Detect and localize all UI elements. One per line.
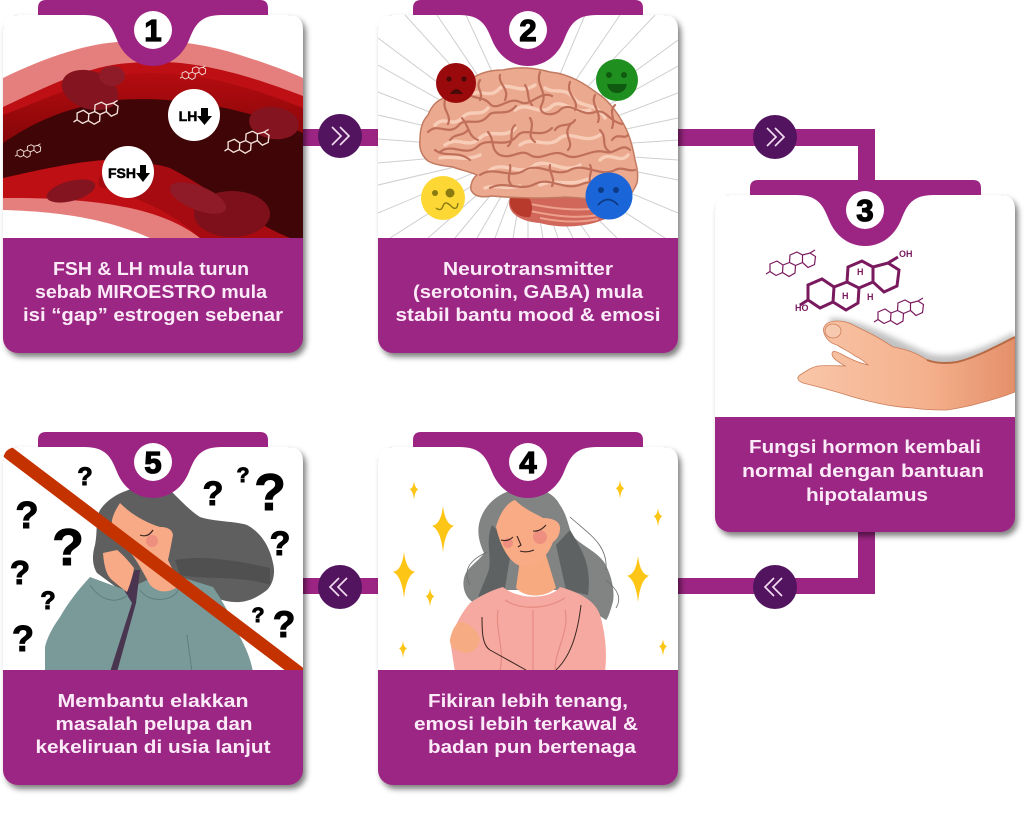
caption 1: sebab MIROESTRO mula	[35, 281, 268, 302]
illustration: blood vessel	[3, 41, 303, 238]
hair	[93, 487, 274, 602]
molecule labels: HO	[795, 303, 808, 313]
hand shadow	[830, 318, 1015, 370]
caption 4: badan pun bertenaga	[428, 736, 637, 757]
molecule labels: H	[867, 292, 874, 302]
caption 5: kekeliruan di usia lanjut	[36, 736, 270, 757]
badge: FSH down	[102, 146, 154, 198]
tab: number 1	[38, 0, 268, 66]
molecule labels: H	[857, 267, 864, 277]
hand	[450, 622, 480, 653]
tab: number 2	[413, 0, 643, 66]
cerebellum	[509, 198, 605, 226]
tab: number 4: 4	[519, 445, 537, 480]
tab: number 1: 1	[144, 13, 162, 48]
connector: step 4 to 5	[300, 565, 382, 609]
gyri highlights	[435, 85, 628, 190]
caption 4: emosi lebih terkawal &	[414, 713, 638, 734]
caption 1	[23, 258, 283, 325]
connector: step 1 to 2	[300, 114, 382, 158]
face and hand	[112, 503, 180, 591]
tab: number 3	[750, 180, 981, 246]
molecule labels	[795, 249, 912, 313]
caption 5	[36, 690, 270, 757]
question marks: ?	[10, 554, 30, 591]
card base 5	[3, 447, 303, 785]
illustration: brain with moods	[378, 15, 678, 238]
caption 5: Membantu elakkan	[58, 690, 248, 711]
caption 3: Fungsi hormon kembali	[749, 436, 981, 457]
caption 5: masalah pelupa dan	[56, 713, 253, 734]
card base 1	[3, 15, 303, 353]
question marks: ?	[203, 475, 223, 513]
tab: number 2: 2	[519, 13, 537, 48]
question marks: ?	[270, 525, 290, 563]
caption 2	[396, 258, 660, 325]
caption 3: normal dengan bantuan	[742, 460, 984, 481]
mood: green happy	[596, 59, 638, 101]
sweater	[45, 572, 253, 672]
caption 4	[414, 690, 638, 757]
molecules	[15, 66, 269, 158]
panel: step 4	[378, 447, 678, 785]
brain body	[420, 68, 638, 207]
tab: number 5	[38, 432, 268, 498]
molecule labels: OH	[899, 249, 912, 259]
question marks: ?	[52, 519, 84, 577]
mood: blue sad	[586, 172, 632, 220]
panel: step 2	[378, 15, 678, 353]
mood: yellow confused	[421, 176, 465, 220]
panel: step 1	[3, 15, 303, 353]
pink sweater	[450, 587, 606, 672]
question marks	[10, 463, 295, 659]
tab: number 4	[413, 432, 643, 498]
illustration: hormone molecules and hand	[766, 249, 1015, 410]
blood cells	[44, 63, 301, 237]
question marks: ?	[273, 604, 295, 645]
badge: LH down	[168, 89, 220, 141]
panel: step 5	[3, 447, 303, 785]
question marks: ?	[40, 587, 56, 615]
molecules	[766, 250, 924, 324]
caption 2: Neurotransmitter	[443, 258, 613, 279]
panel: step 3	[715, 195, 1015, 532]
card base 3	[715, 195, 1015, 532]
red prohibition stripe	[9, 453, 298, 672]
question marks: ?	[77, 463, 93, 491]
connector: step 2 to 3	[675, 115, 875, 184]
sparkles	[393, 480, 667, 658]
illustration: calm woman with sparkles	[393, 480, 667, 672]
caption 3	[742, 436, 984, 505]
caption 1: isi “gap” estrogen sebenar	[23, 304, 283, 325]
caption 2: stabil bantu mood & emosi	[396, 304, 660, 325]
molecule labels: H	[842, 291, 848, 301]
card base 2	[378, 15, 678, 353]
question marks: ?	[15, 495, 39, 537]
caption 2: (serotonin, GABA) mula	[413, 281, 644, 302]
badge: LH down: LH	[179, 108, 197, 124]
connector: step 3 to 4	[675, 528, 875, 609]
card base 4	[378, 447, 678, 785]
caption 3: hipotalamus	[806, 484, 928, 505]
caption 4: Fikiran lebih tenang,	[428, 690, 628, 711]
badge: FSH down: FSH	[108, 165, 136, 181]
caption 1: FSH & LH mula turun	[53, 258, 249, 279]
illustration: confused woman crossed out	[9, 453, 298, 672]
neck and face	[516, 555, 556, 596]
tab: number 3: 3	[856, 193, 874, 228]
question marks: ?	[12, 618, 34, 659]
hair	[463, 488, 614, 620]
question marks: ?	[254, 464, 286, 522]
hand	[798, 321, 1015, 410]
tab: number 5: 5	[144, 445, 162, 480]
question marks: ?	[237, 464, 249, 487]
mood: red angry	[436, 63, 476, 103]
gyri folds	[428, 72, 635, 192]
question marks: ?	[252, 604, 264, 627]
